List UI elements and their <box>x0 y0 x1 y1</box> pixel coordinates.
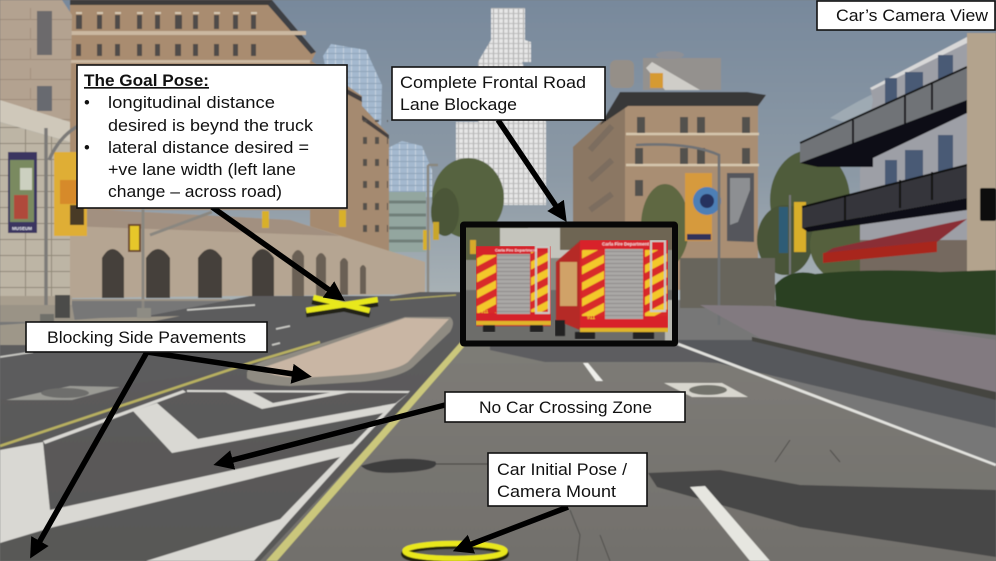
callout: car initial pose / camera mount: Camera Mount <box>497 483 616 501</box>
long shadow on right lane <box>648 470 996 557</box>
manhole plate <box>664 383 748 397</box>
purple museum banner: MUSEUM <box>12 226 32 231</box>
arrow: side pavement to island <box>147 352 300 375</box>
right edge diagonal beside yellow line <box>240 392 410 561</box>
white line right <box>678 344 996 465</box>
glass tower second <box>388 141 432 198</box>
right fire truck <box>555 240 668 339</box>
left distant lane dashes <box>0 305 290 357</box>
arrow: car initial pose to yellow ring <box>464 507 568 547</box>
arrow: side pavement to lower left <box>36 352 147 548</box>
road shadow of pole <box>362 459 500 472</box>
right fire truck: Carla Fire Department <box>602 242 650 246</box>
callout: car's camera view: Car’s Camera View <box>836 7 988 25</box>
callout: goal pose: change – across road) <box>108 183 282 201</box>
distant left pavement <box>0 305 75 322</box>
car initial pose yellow ring <box>404 544 506 561</box>
right pavement <box>700 305 996 395</box>
red awning <box>823 219 967 263</box>
white dashes centre <box>583 363 770 561</box>
top thin line <box>187 390 410 393</box>
left manhole plate <box>6 386 120 400</box>
traffic poles and lights <box>72 165 439 316</box>
callout: goal pose: • <box>84 139 90 157</box>
street lamp <box>636 144 719 325</box>
callout: blocking side pavements: Blocking Side Pavements <box>47 329 246 347</box>
shadow across lane in front of trucks <box>490 340 718 363</box>
heading: the goal pose: The Goal Pose: <box>84 72 209 90</box>
lamp bases and bin <box>40 295 151 322</box>
middle chevron <box>133 403 397 453</box>
yellow centre line <box>266 338 470 561</box>
stone building far left <box>0 0 72 322</box>
callout: no car crossing zone <box>445 392 685 422</box>
left lamp post <box>46 125 80 318</box>
brick hotel left <box>70 0 316 210</box>
modern building with balconies <box>800 37 968 276</box>
right hedge <box>775 270 996 335</box>
circular mandala banner <box>685 173 721 241</box>
bullet one: longitudinal distance <box>108 94 275 112</box>
white skyscraper <box>456 8 546 205</box>
callout: complete frontal road lane blockage: Lane Blockage <box>400 96 517 114</box>
asphalt ground <box>0 292 470 561</box>
right fire truck: 911 <box>587 315 595 321</box>
callout: complete frontal road lane blockage <box>392 67 605 120</box>
right brick building <box>573 51 766 290</box>
purple museum banner <box>8 152 37 233</box>
right carriageway <box>260 340 996 561</box>
goal pose yellow cross marker <box>309 298 375 314</box>
left fire truck <box>476 246 551 332</box>
callout: complete frontal road lane blockage: Complete Frontal Road <box>400 74 586 92</box>
bottom stripe <box>146 517 287 561</box>
central island pavement <box>247 317 453 386</box>
callout: car's camera view <box>817 1 995 30</box>
yellow lane line left <box>0 342 320 446</box>
left block and long stripe <box>0 442 357 543</box>
small top chevron <box>225 392 352 409</box>
green office block <box>388 192 426 252</box>
left street tree <box>431 158 504 238</box>
no-crossing chevron hatching <box>0 390 410 561</box>
left fire truck: 911 <box>481 309 489 314</box>
callout: blocking side pavements <box>26 322 267 352</box>
callout: car initial pose / camera mount: Car Initial Pose / <box>497 461 627 479</box>
cloud haze over right sky <box>830 88 886 122</box>
hotel window rows <box>76 15 256 56</box>
cracks <box>570 440 840 561</box>
tan building corner <box>967 33 996 278</box>
bullet two: lateral distance desired = <box>108 139 309 157</box>
arrow: goal pose to yellow cross <box>212 207 335 294</box>
callout: goal pose: • <box>84 94 90 112</box>
street view behind trucks <box>463 225 675 344</box>
left fire truck: Carla Fire Department <box>495 248 537 252</box>
black and white banner <box>727 173 754 242</box>
thin stripe above middle chevron <box>43 390 186 444</box>
sky <box>0 0 996 300</box>
stone arcade ground floor <box>70 208 425 298</box>
arrow: frontal blockage to trucks <box>498 120 560 212</box>
right kerb <box>752 337 996 400</box>
yellow museum banner <box>54 152 87 236</box>
callout: goal pose <box>77 65 347 208</box>
arrow: no car crossing zone <box>225 405 445 462</box>
callout: car initial pose / camera mount <box>488 453 647 506</box>
distant banners <box>779 195 806 285</box>
callout: no car crossing zone: No Car Crossing Zone <box>479 399 652 417</box>
brick building receding along street <box>310 60 389 262</box>
right trees <box>641 150 890 308</box>
black highlight frame <box>463 224 675 344</box>
callout: goal pose: +ve lane width (left lane <box>108 161 296 179</box>
blockage box with fire trucks <box>463 224 675 344</box>
callout: goal pose: desired is beynd the truck <box>108 117 314 135</box>
glass tower far left <box>323 44 382 126</box>
